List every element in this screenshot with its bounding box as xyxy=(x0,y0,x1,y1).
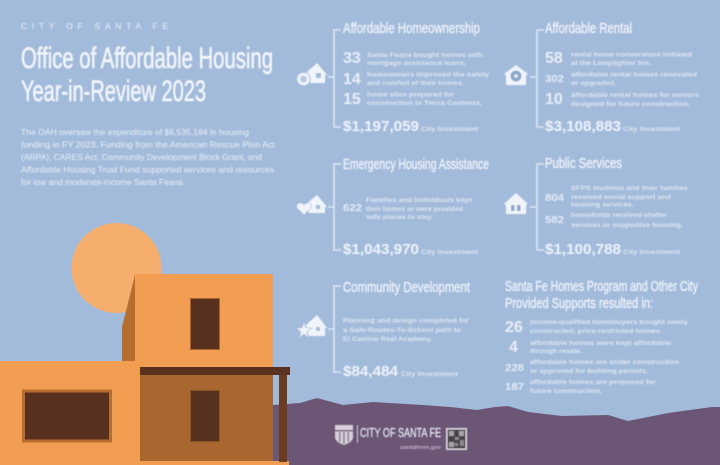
stat 804: received social support and xyxy=(571,194,671,201)
investment: City Investment xyxy=(623,126,681,133)
stat 58 xyxy=(545,50,692,67)
title xyxy=(21,42,273,108)
investment xyxy=(343,363,459,380)
icon: city shield xyxy=(335,425,353,445)
heading: Public Services xyxy=(545,155,622,172)
stat 187 xyxy=(505,379,656,395)
heading: Provided Supports resulted in: xyxy=(505,295,653,312)
stat 302 xyxy=(545,72,697,87)
icon: house and heart xyxy=(297,195,327,215)
stat 14: 14 xyxy=(343,71,361,88)
panel: community development xyxy=(296,279,471,380)
stat 582: 582 xyxy=(545,215,564,226)
stat 14: homeowners improved the safety xyxy=(367,72,489,78)
stat 15: home sites prepared for xyxy=(367,92,454,98)
stat 15 xyxy=(343,91,482,108)
stat 804 xyxy=(545,185,688,208)
bracket xyxy=(328,286,341,372)
stat 582: households received shelter xyxy=(571,212,667,219)
stat 14 xyxy=(343,71,489,88)
intro paragraph: (ARPA), CARES Act, Community Development Block Grant, and xyxy=(21,153,262,162)
stat 10: affordable rental homes for seniors xyxy=(571,92,699,99)
stat 58: at the Lamplighter Inn. xyxy=(571,60,651,67)
stat 10 xyxy=(545,91,699,108)
investment: City Investment xyxy=(421,126,479,133)
investment xyxy=(343,241,479,258)
investment xyxy=(343,118,479,135)
stat 33 xyxy=(343,50,483,67)
icon: house and star xyxy=(296,315,327,338)
panel: affordable homeownership xyxy=(297,20,489,135)
qr code xyxy=(446,428,467,450)
stat 15: 15 xyxy=(343,91,361,108)
investment: $1,197,059 xyxy=(343,118,419,135)
eyebrow: CITY OF SANTA FE xyxy=(21,21,168,31)
description: a Safe-Routes-To-School path to xyxy=(343,327,461,334)
sun xyxy=(72,223,162,313)
investment xyxy=(545,118,681,135)
stat 10: designed for future construction. xyxy=(571,101,690,108)
stat 15: construction in Tierra Contenta. xyxy=(367,100,482,107)
stat 302: or upgraded. xyxy=(571,80,616,87)
stat 622: Families and Individuals kept xyxy=(366,197,473,204)
bracket xyxy=(328,164,341,250)
mountains xyxy=(273,398,720,465)
investment: City Investment xyxy=(421,249,479,256)
stat 26 xyxy=(505,319,688,336)
heading: Affordable Homeownership xyxy=(343,20,480,37)
stat 228: or approved for building permits. xyxy=(530,368,648,375)
website: santafenm.gov xyxy=(400,445,441,451)
description xyxy=(343,318,469,343)
stat 187: future construction. xyxy=(530,388,602,395)
stat 58: rental home conversions initiated xyxy=(571,52,692,58)
investment: $3,108,883 xyxy=(545,118,621,135)
bracket xyxy=(328,30,341,127)
panel: emergency housing assistance xyxy=(297,156,489,258)
stat 187: 187 xyxy=(505,382,524,393)
stat 4 xyxy=(509,339,671,356)
stat 582: services or supportive housing. xyxy=(571,222,683,229)
stat 26: income-qualified homebuyers bought newly xyxy=(530,319,688,326)
divider xyxy=(356,425,359,443)
intro paragraph: for low and moderate-income Santa Feans. xyxy=(21,178,185,187)
heading: Emergency Housing Assistance xyxy=(343,156,489,173)
heading xyxy=(505,278,698,312)
panel: public services xyxy=(504,155,688,258)
stat 622: safe places to stay. xyxy=(366,214,433,221)
icon: house with dollar xyxy=(504,65,528,85)
intro paragraph: The OAH oversaw the expenditure of $6,535,184 in housing xyxy=(21,128,249,137)
stat 302: 302 xyxy=(545,74,564,85)
intro paragraph: funding in FY 2023. Funding from the American Rescue Plan Act xyxy=(21,140,276,150)
panel: affordable rental xyxy=(504,20,699,135)
stat 622: their homes or were provided xyxy=(366,206,463,213)
city name: CITY OF SANTA FE xyxy=(360,425,441,440)
bracket xyxy=(530,30,544,127)
description: El Camino Real Academy. xyxy=(343,336,432,343)
investment: $1,100,788 xyxy=(545,241,621,258)
stat 33: 33 xyxy=(343,50,361,67)
stat 622 xyxy=(343,197,473,221)
bracket xyxy=(530,164,544,250)
stat 4: 4 xyxy=(509,339,518,356)
logo block xyxy=(335,425,467,451)
stat 804: SFPS students and their families xyxy=(571,185,688,192)
stat 26: constructed, price-restricted homes. xyxy=(530,328,662,335)
stat 33: Santa Feans bought homes with xyxy=(367,52,483,59)
stat 187: affordable homes are proposed for xyxy=(530,379,656,386)
stat 228: affordable homes are under construction xyxy=(530,359,679,366)
intro paragraph: Affordable Housing Trust Fund supported services and resources xyxy=(21,166,274,174)
house illustration xyxy=(0,274,290,465)
stat 582 xyxy=(545,212,683,229)
stat 622: 622 xyxy=(343,203,362,214)
stat 804: 804 xyxy=(545,193,564,204)
title: Office of Affordable Housing xyxy=(21,42,273,75)
investment xyxy=(545,241,681,258)
stat 228: 228 xyxy=(505,363,524,374)
stat 58: 58 xyxy=(545,50,563,67)
heading: Affordable Rental xyxy=(545,20,632,37)
panel: santa fe homes program xyxy=(505,278,698,395)
intro paragraph xyxy=(21,128,276,187)
heading: Community Development xyxy=(343,279,471,296)
stat 26: 26 xyxy=(505,319,523,336)
description: Planning and design completed for xyxy=(343,318,469,324)
investment: City Investment xyxy=(623,249,681,256)
stat 302: affordable rental homes renovated xyxy=(571,72,697,78)
investment: City Investment xyxy=(401,371,459,378)
title: Year-in-Review 2023 xyxy=(21,75,206,108)
icon: house and coin xyxy=(297,63,327,86)
stat 4: affordable homes were kept affordable xyxy=(530,340,671,347)
stat 14: and comfort of their homes. xyxy=(367,80,464,87)
header block xyxy=(21,21,276,187)
icon: house with people xyxy=(504,193,528,214)
stat 804: housing services. xyxy=(571,202,634,208)
stat 10: 10 xyxy=(545,91,563,108)
investment: $84,484 xyxy=(343,363,399,380)
stat 33: mortgage assistance loans. xyxy=(367,60,466,67)
stat 4: through resale. xyxy=(530,348,582,355)
stat 228 xyxy=(505,359,679,375)
investment: $1,043,970 xyxy=(343,241,419,258)
